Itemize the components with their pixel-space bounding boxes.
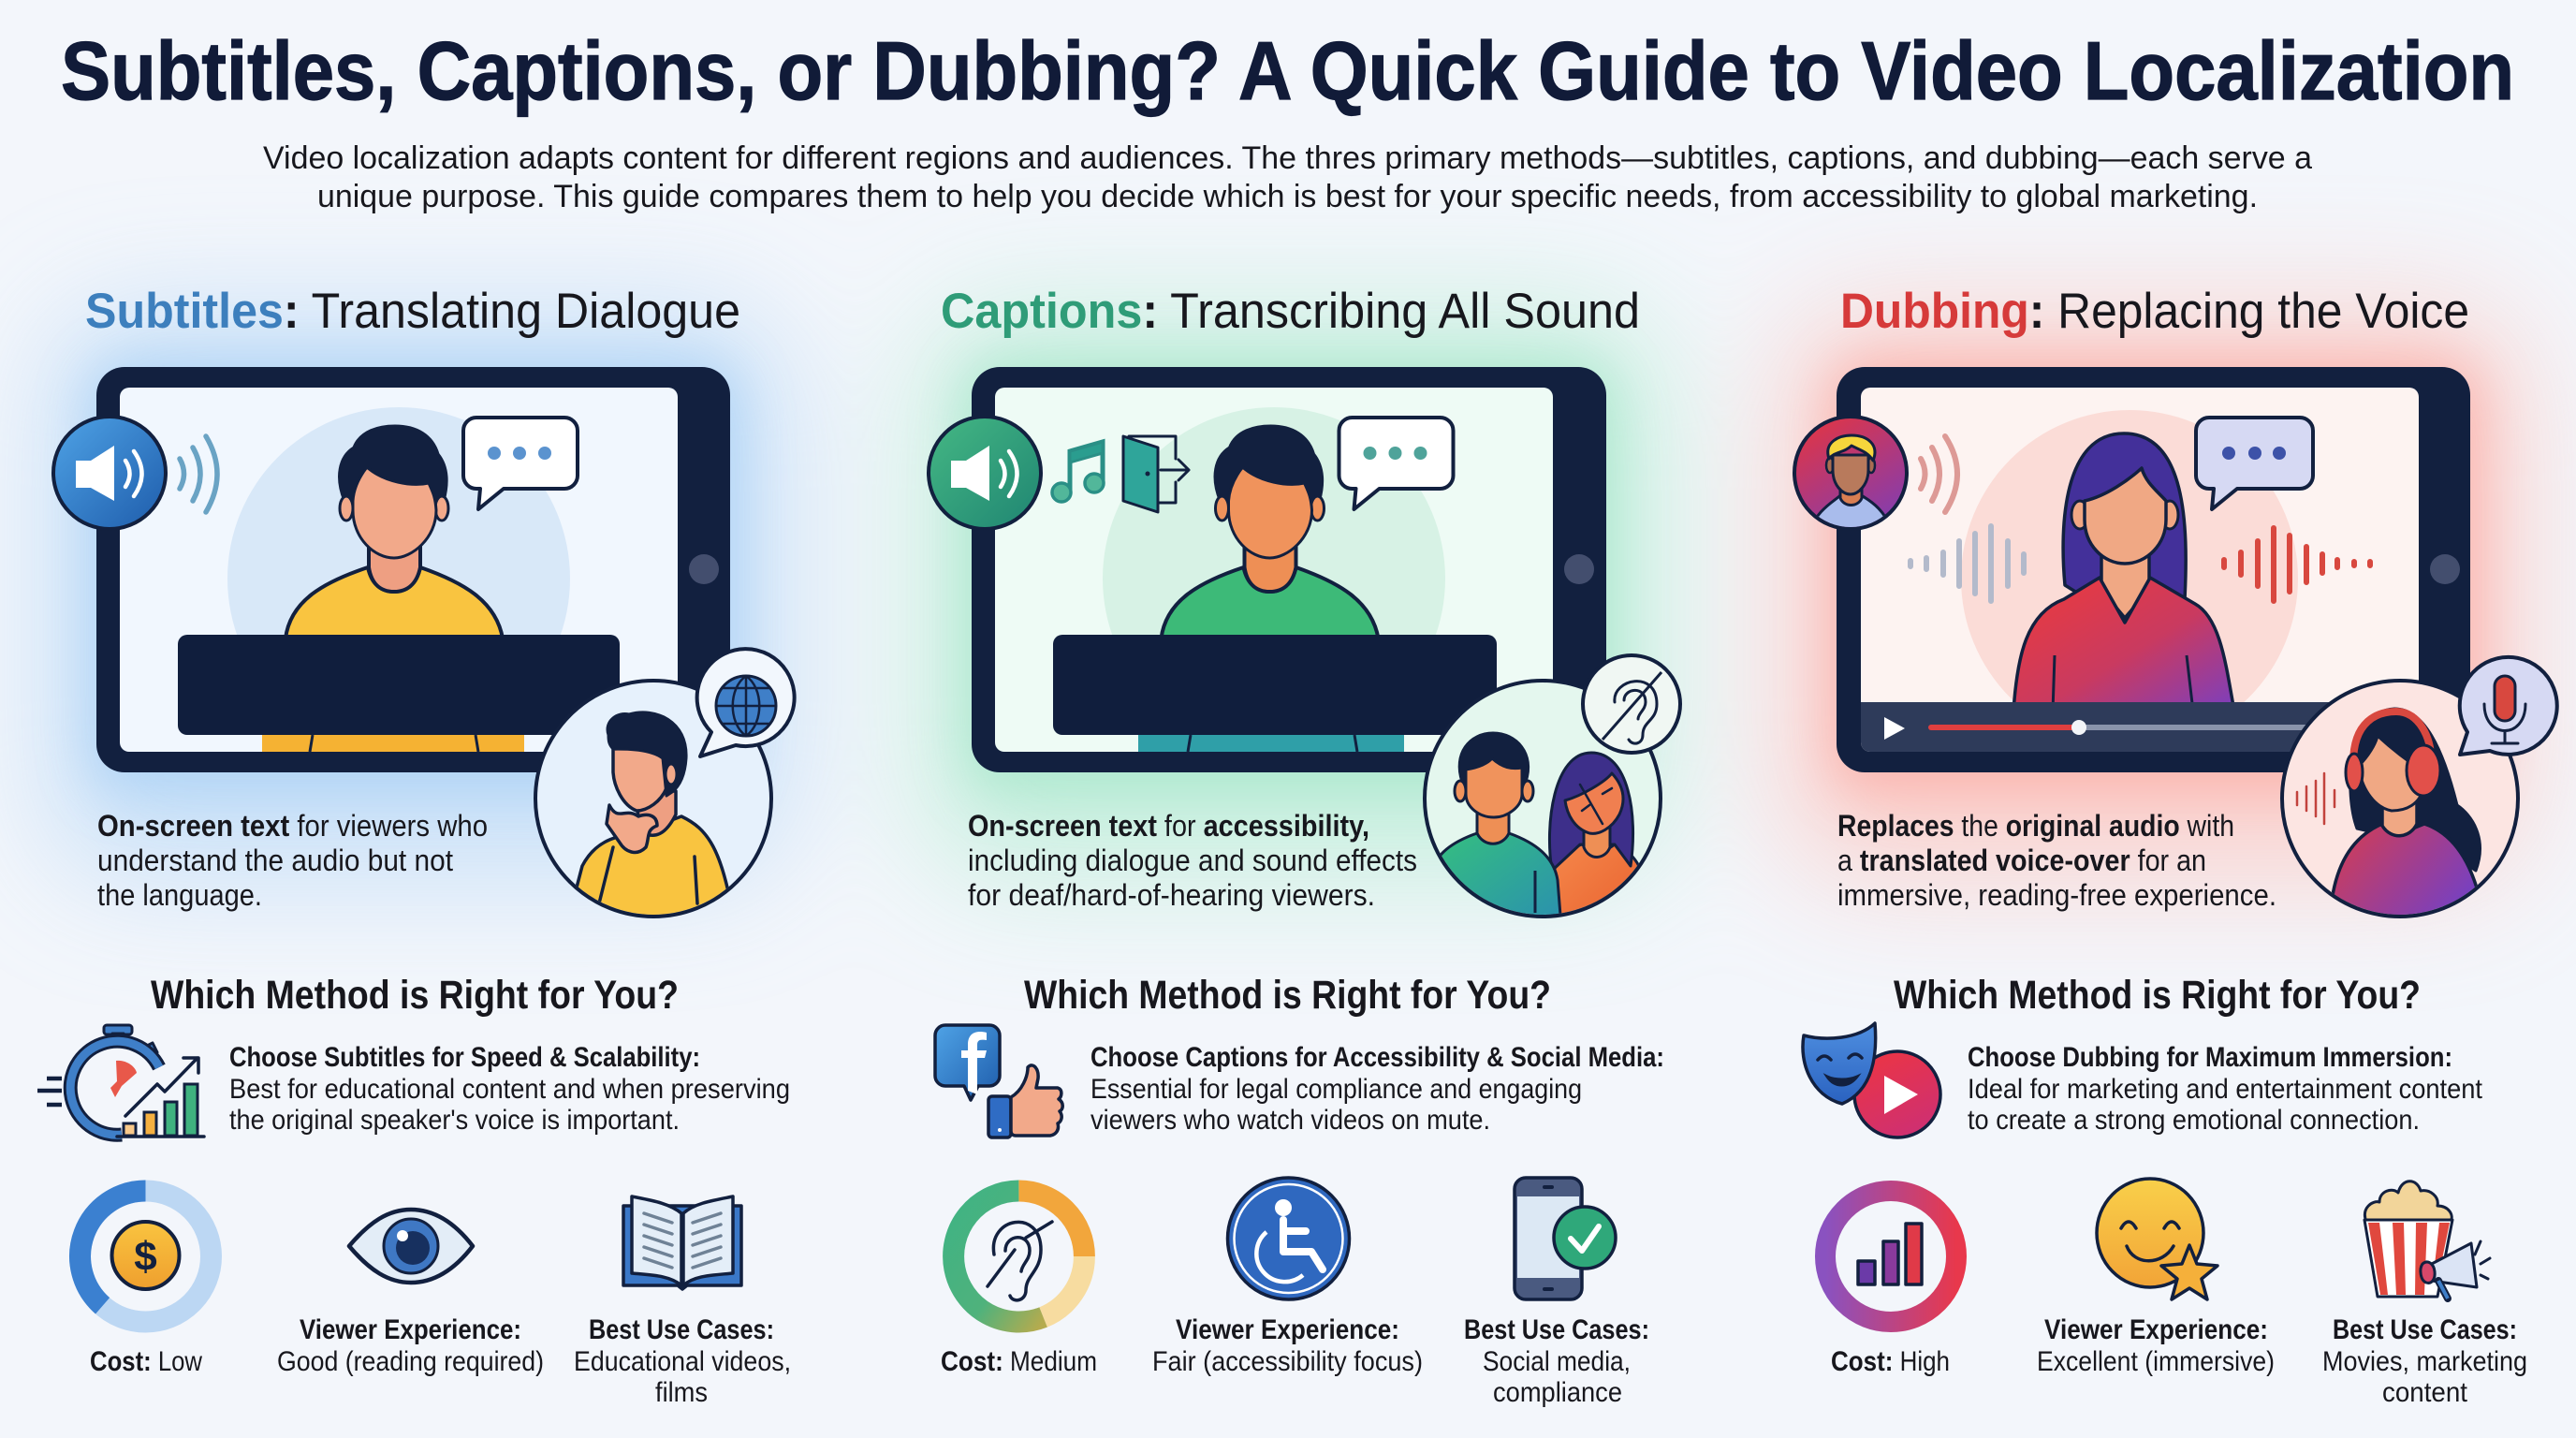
description: subtitles (97, 809, 488, 912)
metric: viewer experience good (277, 1210, 544, 1377)
icon: door (1123, 436, 1189, 512)
icon: sound waves (180, 436, 217, 512)
recommendation: captions: Choose Captions for Accessibility & Social Media: (1090, 1042, 1664, 1073)
icon: stopwatch and growth chart (37, 1025, 204, 1137)
speech bubble (1339, 418, 1453, 509)
panel: dubbing (1794, 284, 2557, 1408)
recommendation: captions: viewers who watch videos on mute. (1090, 1105, 1490, 1136)
metric: best use cases movies: content (2382, 1377, 2468, 1408)
icon: social bubble and thumbs up (935, 1025, 1062, 1137)
recommendation: dubbing: to create a strong emotional connection. (1968, 1105, 2420, 1136)
icon: music note (1052, 442, 1104, 502)
description: captions: including dialogue and sound effects (968, 844, 1417, 877)
metric: viewer experience fair (1152, 1178, 1423, 1377)
heading: which method: Which Method is Right for You? (1894, 973, 2421, 1018)
icon: hearing impaired bubble (1583, 655, 1680, 753)
waveform: original voice (1910, 526, 2024, 601)
icon: theatre mask and play button (1803, 1023, 1940, 1137)
metric: cost high (1825, 1191, 1956, 1377)
metric: viewer experience excellent: Viewer Experience: (2044, 1314, 2268, 1345)
intro text (263, 140, 2312, 214)
recommendation: captions: Essential for legal compliance and engaging (1090, 1074, 1582, 1105)
icon: microphone bubble (2460, 657, 2557, 755)
metric: cost high: Cost: High (1831, 1346, 1950, 1377)
metric: viewer experience excellent: Excellent (immersive) (2037, 1346, 2275, 1377)
description: dubbing: Replaces the original audio with (1837, 809, 2234, 843)
speech bubble (2196, 418, 2313, 509)
tablet: captions (972, 367, 1606, 772)
waveform: dubbed voice (2224, 528, 2370, 601)
metric: viewer experience good: Good (reading required) (277, 1346, 544, 1377)
recommendation: dubbing: Choose Dubbing for Maximum Immersion: (1968, 1042, 2452, 1073)
metric: best use cases educational (574, 1196, 791, 1408)
metric: best use cases movies: Movies, marketing (2322, 1346, 2527, 1377)
metric: viewer experience fair: Viewer Experience: (1176, 1314, 1399, 1345)
description: subtitles: the language. (97, 878, 262, 912)
description: dubbing: immersive, reading-free experience. (1837, 878, 2276, 912)
metric: viewer experience excellent (2037, 1179, 2275, 1377)
recommendation: captions (1090, 1042, 1664, 1136)
heading: which method: Which Method is Right for You? (1024, 973, 1551, 1018)
description: dubbing (1837, 809, 2276, 912)
icon: speaker (53, 417, 166, 529)
viewer: woman with headphones (2282, 681, 2518, 927)
panel: subtitles (37, 284, 795, 1408)
icon: sound waves (1921, 436, 1957, 512)
description: dubbing: a translated voice-over for an (1837, 844, 2206, 877)
description: subtitles: understand the audio but not (97, 844, 453, 877)
metric: best use cases movies: Best Use Cases: (2333, 1314, 2517, 1345)
metric: best use cases movies (2322, 1181, 2527, 1408)
description: captions: for deaf/hard-of-hearing viewers. (968, 878, 1375, 912)
metric: cost medium: Cost: Medium (941, 1346, 1097, 1377)
intro text: unique purpose. This guide compares them to help you decide which is best for your specific needs, from accessibility to global marketing. (317, 179, 2258, 214)
metric: cost medium (941, 1191, 1097, 1377)
avatar: original speaker (1794, 417, 1907, 534)
metric: best use cases social media (1464, 1178, 1649, 1408)
metric: cost low: Cost: Low (90, 1346, 202, 1377)
metric: best use cases educational: Educational videos, (574, 1346, 791, 1377)
heading: subtitles: Subtitles: Translating Dialogue (85, 284, 740, 339)
metric: cost low (80, 1191, 212, 1377)
description: captions: On-screen text for accessibility, (968, 809, 1369, 843)
metric: best use cases educational: Best Use Cases: (589, 1314, 774, 1345)
panel: captions (929, 284, 1680, 1408)
recommendation: subtitles: Best for educational content and when preserving (229, 1074, 790, 1105)
description: subtitles: On-screen text for viewers who (97, 809, 488, 843)
icon: speaker (929, 417, 1041, 529)
metric: viewer experience fair: Fair (accessibility focus) (1152, 1346, 1423, 1377)
recommendation: dubbing: Ideal for marketing and entertainment content (1968, 1074, 2483, 1105)
metric: best use cases social media: Best Use Cases: (1464, 1314, 1649, 1345)
heading: dubbing: Dubbing: Replacing the Voice (1840, 284, 2469, 339)
intro text: Video localization adapts content for different regions and audiences. The thres primary methods—subtitles, captions, and dubbing—each serve a (263, 140, 2312, 176)
viewer: thinking person (535, 681, 771, 927)
tablet: dubbing (1837, 367, 2470, 772)
heading: which method: Which Method is Right for You? (151, 973, 679, 1018)
metric: viewer experience good: Viewer Experience: (300, 1314, 521, 1345)
metric: best use cases social media: Social media, (1483, 1346, 1631, 1377)
recommendation: subtitles: the original speaker's voice is important. (229, 1105, 680, 1136)
recommendation: subtitles (229, 1042, 790, 1136)
heading: captions: Captions: Transcribing All Sound (941, 284, 1640, 339)
viewers: man and woman (1425, 681, 1661, 927)
speech bubble (463, 418, 578, 509)
recommendation: dubbing (1968, 1042, 2483, 1136)
description: captions (968, 809, 1417, 912)
metric: cost low: $ (134, 1234, 157, 1280)
metric: best use cases social media: compliance (1493, 1377, 1622, 1408)
metric: best use cases educational: films (655, 1377, 708, 1408)
recommendation: subtitles: Choose Subtitles for Speed & Scalability: (229, 1042, 700, 1073)
icon: globe bubble (697, 649, 795, 756)
tablet: subtitles (96, 367, 730, 772)
